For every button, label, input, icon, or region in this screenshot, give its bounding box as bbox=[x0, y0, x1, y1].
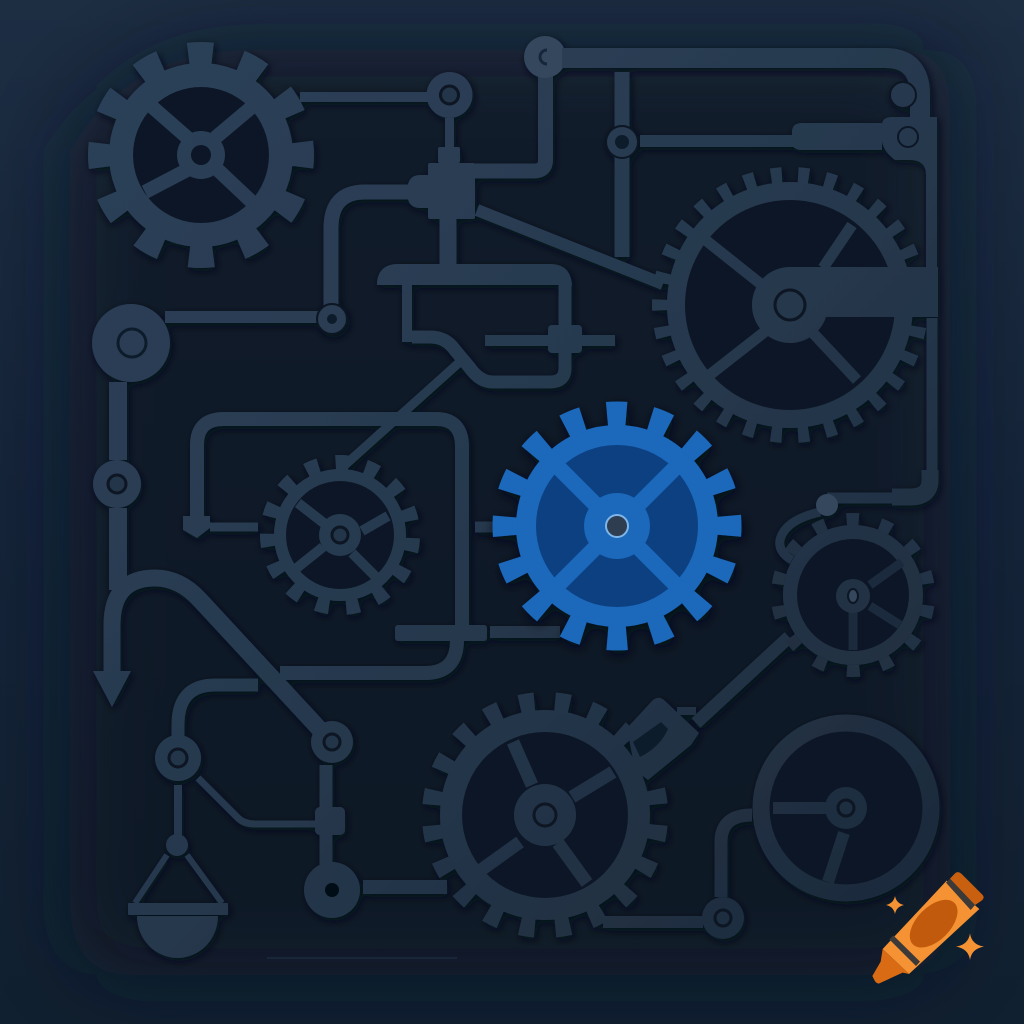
gear: blue highlighted bbox=[505, 414, 729, 638]
gear: large top right bbox=[661, 176, 938, 434]
node: bottom bbox=[304, 862, 360, 918]
gear: right bbox=[777, 494, 929, 671]
collar bbox=[780, 512, 820, 560]
crayon cap bbox=[950, 872, 984, 905]
top right frame bbox=[562, 58, 932, 498]
crayon bands bbox=[889, 879, 975, 966]
clamp block bbox=[792, 117, 937, 270]
left column bbox=[93, 382, 325, 735]
pipes: upper centre bbox=[165, 75, 663, 317]
node: bottom right bbox=[702, 897, 744, 939]
gear: small centre left bbox=[259, 454, 421, 616]
crank arm bbox=[752, 267, 938, 343]
node: left bbox=[93, 460, 141, 508]
crayon tip bbox=[872, 949, 909, 983]
sparkle: small bbox=[886, 896, 904, 914]
lower left linkage bbox=[128, 765, 447, 958]
connector block bbox=[407, 147, 475, 219]
icon: crayon logo bbox=[872, 872, 984, 983]
crayon label oval bbox=[901, 891, 966, 956]
hook arrow bbox=[112, 578, 325, 735]
node: lower left bbox=[155, 735, 201, 781]
crayon body bbox=[883, 881, 979, 974]
gear: top left bbox=[99, 53, 303, 257]
bracket linkage bbox=[377, 264, 615, 382]
node: small heart pivot bbox=[606, 126, 638, 158]
node: diagonal end bbox=[311, 721, 353, 763]
node: frame corner bbox=[890, 82, 916, 108]
sparkle: large bbox=[956, 933, 984, 960]
gear: bottom centre bbox=[416, 686, 674, 944]
node: top centre bbox=[426, 72, 472, 118]
faint floor line bbox=[267, 957, 457, 959]
frame around small gear bbox=[178, 360, 560, 738]
link arm bbox=[627, 637, 789, 780]
hanging weight bbox=[135, 855, 222, 903]
backdrop shadow bbox=[70, 50, 950, 975]
node: pipe joint bbox=[317, 304, 347, 334]
wheel pipe bbox=[603, 815, 752, 922]
wheel bbox=[761, 723, 931, 893]
mechanism bbox=[92, 36, 938, 958]
node: large left bbox=[92, 304, 170, 382]
node: top pivot bbox=[524, 36, 566, 78]
